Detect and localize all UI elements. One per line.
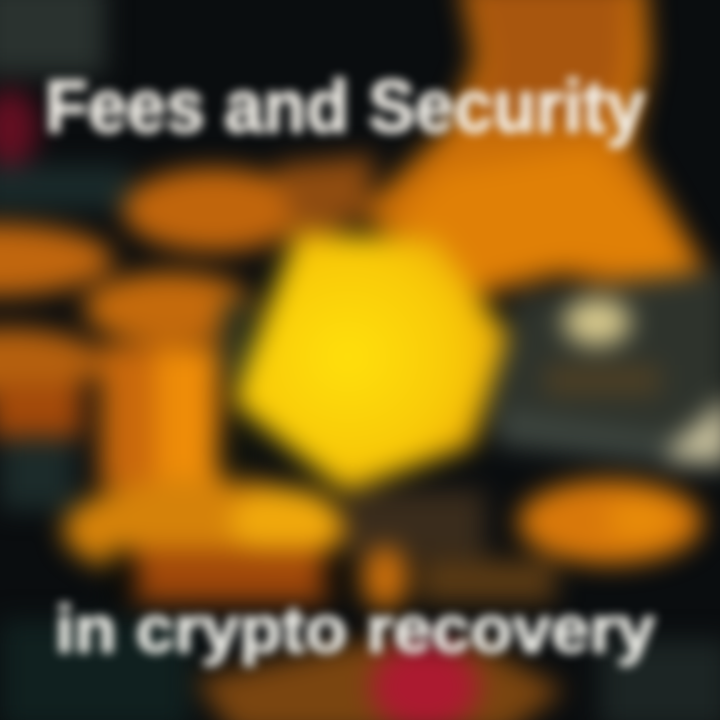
gold coin lower left [63,478,347,602]
device panel right [490,268,720,472]
bottom center elements [195,490,565,720]
gold coin right [518,480,702,564]
orange hand and arm top right [360,0,715,298]
central glowing yellow hexagon [232,232,508,492]
subtitle: in crypto recovery: in crypto recovery [55,592,655,666]
red orb bottom [371,643,479,720]
title: Fees and Security: Fees and Security [45,65,645,148]
device highlights [563,298,720,462]
dark gaps [106,295,354,608]
stacked coins left [0,155,375,487]
red glow top left [0,90,38,166]
